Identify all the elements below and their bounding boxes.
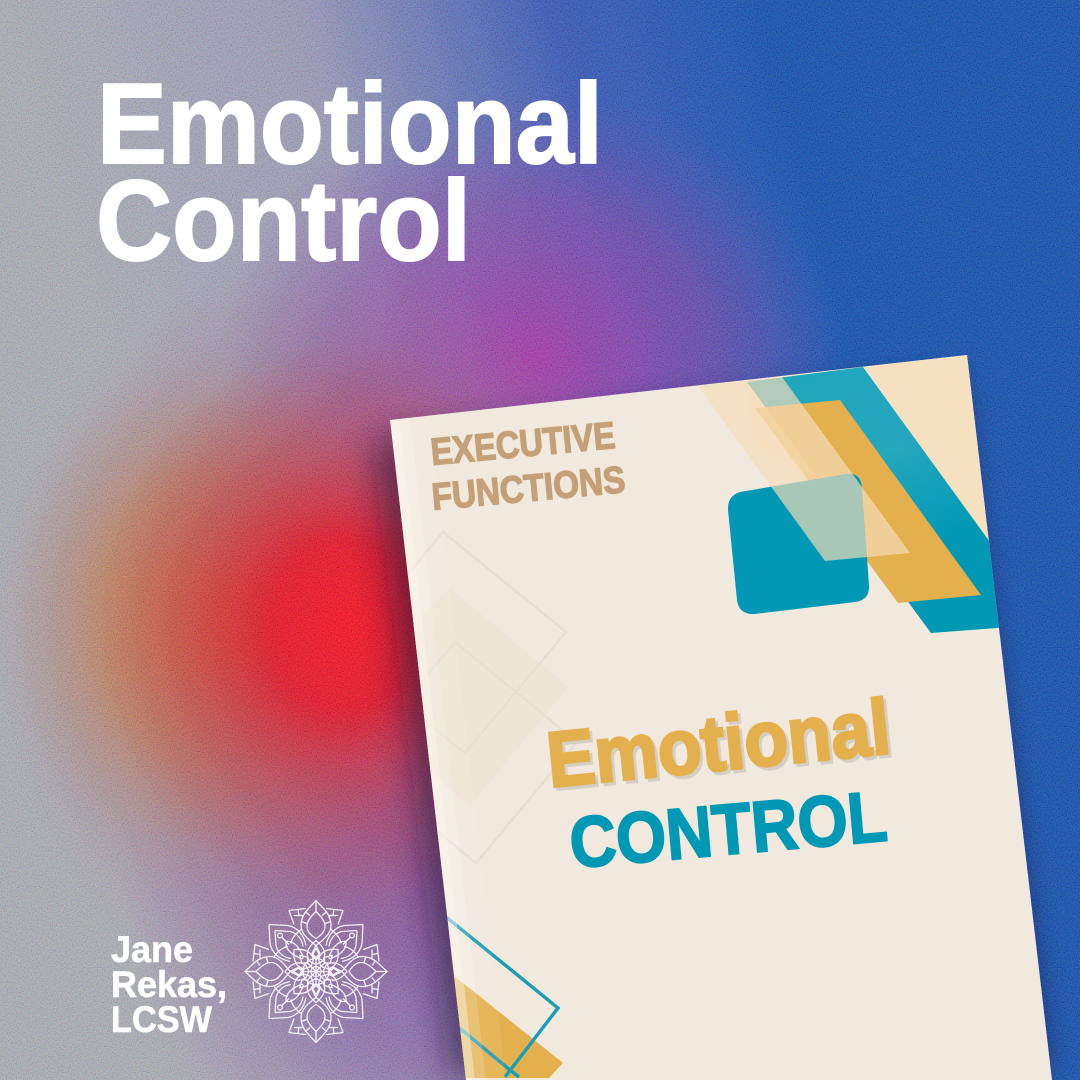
author name [111, 929, 227, 1040]
book title: Emotional shadow: Emotional [546, 685, 897, 807]
icon: mandala [245, 900, 387, 1042]
gold band [755, 400, 981, 603]
faint filled diamond [414, 588, 568, 800]
spine highlight [390, 416, 506, 1080]
heading: Emotional Control: Control [96, 158, 471, 285]
book title: Emotional: Emotional [543, 682, 894, 804]
teal rounded square [728, 474, 869, 614]
translucent peach overlay [698, 377, 910, 561]
heading: Emotional Control: Emotional [97, 61, 603, 188]
book label: Executive Functions: EXECUTIVE [429, 415, 617, 474]
gold corner shape [450, 975, 563, 1078]
teal outlined diamond [440, 912, 558, 1077]
faint outlined diamonds [408, 530, 576, 864]
cover artwork [342, 350, 1010, 1080]
book cover [390, 355, 1052, 1080]
author name: LCSW [111, 999, 212, 1040]
corner peach shape [864, 355, 990, 545]
secondary peach fold [755, 393, 814, 478]
teal band [747, 367, 1010, 633]
book label: Executive Functions: FUNCTIONS [430, 459, 627, 519]
book title: Control: CONTROL [566, 777, 890, 884]
book shadow [372, 372, 1050, 1078]
author name: Jane [111, 929, 193, 970]
author name: Rekas, [111, 964, 227, 1005]
book label: Executive Functions [429, 415, 627, 519]
book [342, 350, 1052, 1080]
heading: Emotional Control [96, 61, 603, 285]
